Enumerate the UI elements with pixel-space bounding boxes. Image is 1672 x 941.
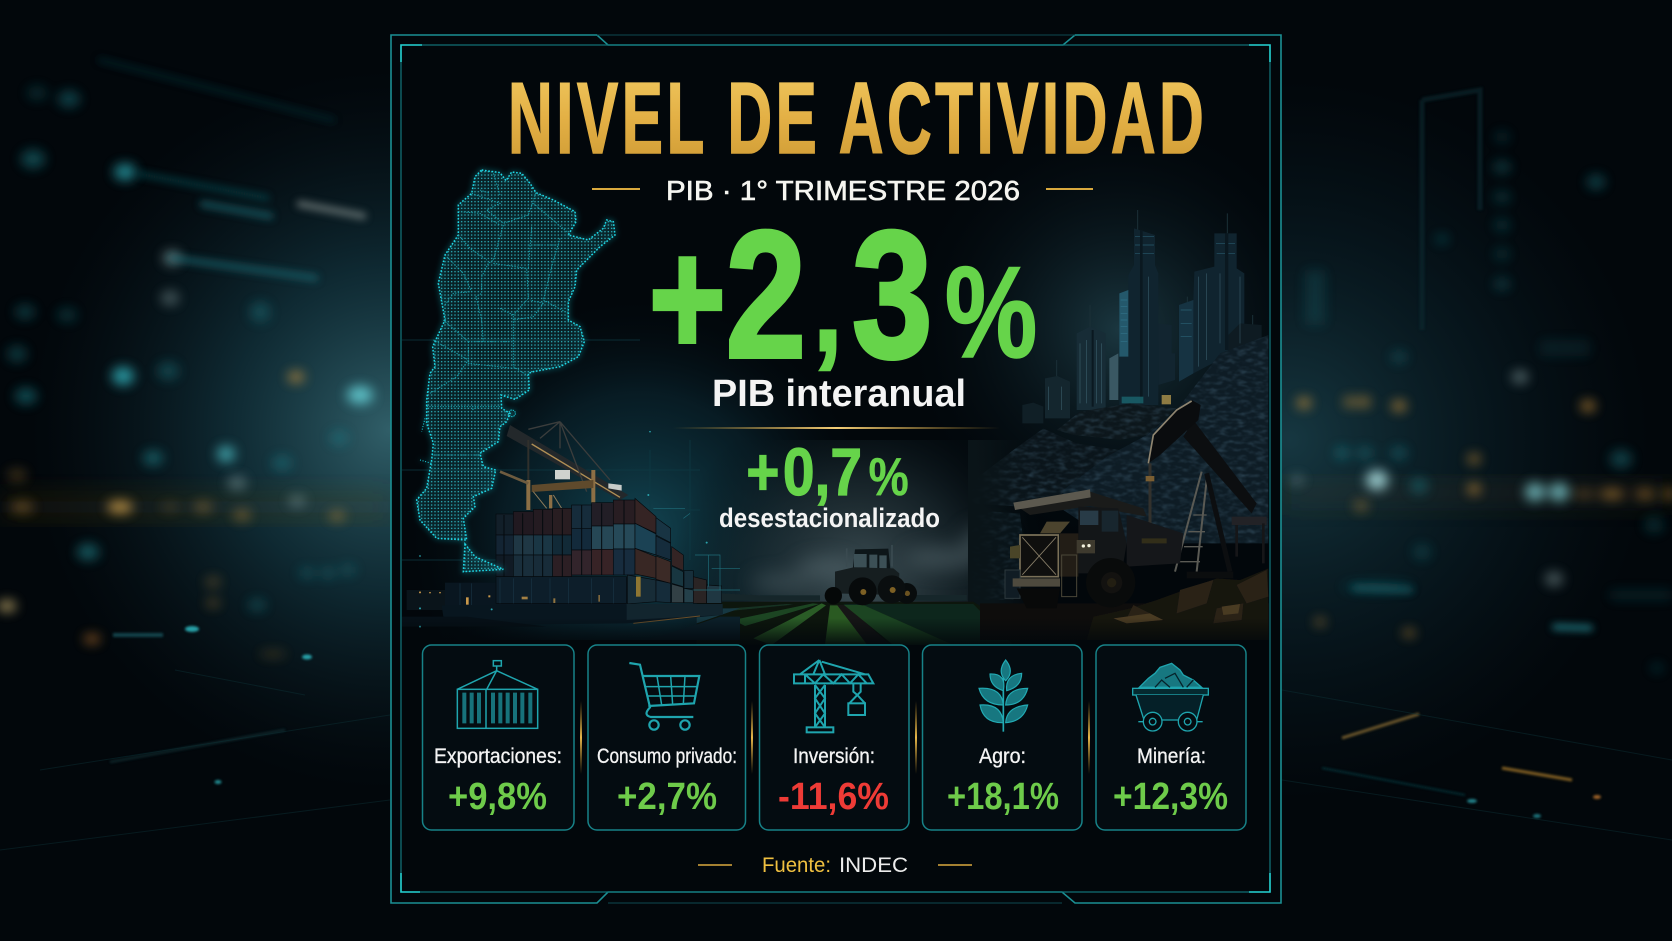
source line: INDEC xyxy=(839,854,908,877)
main figure: 3 xyxy=(852,194,933,396)
panel: Agro: Agro: xyxy=(979,745,1026,768)
main figure label: PIB interanual xyxy=(712,373,966,415)
secondary label: desestacionalizado xyxy=(719,503,940,533)
panel: Exportaciones xyxy=(422,645,574,830)
panel: Minería: +12,3% xyxy=(1113,776,1228,818)
icon: shipping container xyxy=(457,661,538,728)
panel: Consumo privado: +2,7% xyxy=(617,776,717,818)
gantry crane xyxy=(500,422,628,510)
panel: Exportaciones: Exportaciones: xyxy=(434,745,562,768)
containers left stack xyxy=(496,500,635,603)
containers right side xyxy=(627,498,722,604)
main figure: % xyxy=(945,239,1037,385)
panel: Agro: +18,1% xyxy=(947,776,1059,818)
icon: wheat plant xyxy=(979,660,1028,732)
skyline xyxy=(1022,210,1262,423)
icon: shopping cart xyxy=(629,663,699,730)
field with crop rows xyxy=(696,594,980,644)
secondary figure: 0,7 xyxy=(783,436,862,510)
icon: mine cart xyxy=(1133,663,1208,731)
panel: Exportaciones: +9,8% xyxy=(448,776,547,818)
tractor xyxy=(825,545,917,605)
main figure: 2 xyxy=(726,194,806,396)
panel: Consumo privado xyxy=(588,645,746,830)
map of Argentina xyxy=(417,170,615,572)
container ship xyxy=(400,422,740,640)
secondary figure: % xyxy=(869,448,909,507)
main panel xyxy=(391,35,1281,903)
panel: Inversión xyxy=(760,645,909,830)
mountains and rock slope xyxy=(970,335,1268,600)
panel: Consumo privado: Consumo privado: xyxy=(597,745,737,768)
card separators xyxy=(580,701,1090,774)
panel: Minería xyxy=(1096,645,1246,830)
subtitle: PIB · 1° TRIMESTRE 2026 xyxy=(666,175,1020,206)
gold divider xyxy=(673,427,1000,429)
secondary figure: + xyxy=(746,436,780,510)
title: NIVEL DE ACTIVIDAD xyxy=(508,61,1207,175)
foreground rocks xyxy=(1092,568,1268,624)
source line xyxy=(698,854,972,877)
panel: Inversión: -11,6% xyxy=(778,776,889,818)
panel: Agro xyxy=(922,645,1082,830)
main figure: + xyxy=(649,206,726,390)
main figure: , xyxy=(814,234,842,378)
frames xyxy=(391,35,1281,903)
panel: Inversión: Inversión: xyxy=(793,745,875,768)
mining dump truck xyxy=(980,489,1273,640)
icon: tower crane xyxy=(794,660,873,732)
panel: Minería: Minería: xyxy=(1137,745,1206,768)
scene illustration: port, field, mining and skyline xyxy=(402,191,1269,644)
pumpjack xyxy=(1146,400,1267,578)
source line: Fuente: xyxy=(762,854,831,877)
